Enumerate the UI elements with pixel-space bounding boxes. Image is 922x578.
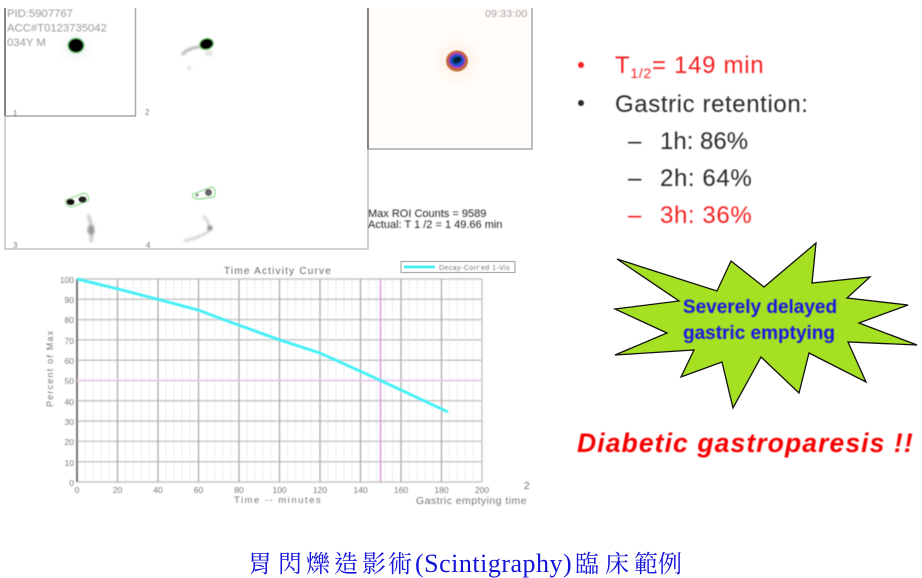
- y axis labels: 80: [65, 315, 74, 325]
- y axis title: Percent of Max: [45, 330, 55, 407]
- x axis labels: 20: [113, 485, 122, 495]
- y axis labels: 90: [65, 295, 74, 305]
- chart grid: [77, 279, 482, 482]
- x axis labels: 140: [353, 485, 368, 495]
- y axis labels: 30: [65, 417, 74, 427]
- x axis labels: 180: [434, 485, 449, 495]
- timestamp: 09:33:00: [485, 8, 527, 20]
- findings list: [578, 52, 809, 229]
- x axis labels: 40: [153, 485, 163, 495]
- half time: T: [615, 52, 630, 79]
- gastric emptying time label: Gastric emptying time: [416, 495, 527, 507]
- x axis labels: 0: [75, 485, 80, 495]
- callout text: gastric emptying: [683, 323, 835, 344]
- decay curve: [77, 279, 448, 412]
- x axis labels: 80: [234, 485, 244, 495]
- panel: gastric scan frames: [5, 8, 368, 250]
- frame numbers: [13, 108, 151, 250]
- half time: [578, 52, 764, 81]
- y axis labels: 50: [65, 376, 74, 386]
- chart: time activity curve: [45, 262, 530, 507]
- ROI result text: Max ROI Counts = 9589: [368, 208, 486, 220]
- callout: starburst: [615, 243, 917, 408]
- x axis labels: 120: [313, 485, 327, 495]
- y axis labels: 0: [69, 478, 74, 488]
- patient information: 034Y M: [7, 37, 46, 49]
- patient information: ACC#T0123735042: [7, 22, 107, 34]
- frame numbers: 2: [145, 108, 150, 117]
- scan frame 2: [182, 37, 215, 70]
- scan frame 1: [64, 35, 88, 57]
- y axis labels: [60, 275, 74, 488]
- callout text: Severely delayed: [683, 297, 837, 318]
- x axis labels: 100: [272, 485, 287, 495]
- y axis labels: 70: [65, 336, 74, 346]
- patient information: PID:5907767: [7, 8, 73, 20]
- chart title: Time Activity Curve: [224, 266, 332, 277]
- ROI result text: Actual: T 1 /2 = 1 49.66 min: [368, 219, 502, 231]
- gastric retention heading: Gastric retention:: [615, 91, 809, 118]
- retention 2h: –: [628, 165, 642, 192]
- colour hot spot: [438, 42, 476, 80]
- x axis labels: 160: [394, 485, 408, 495]
- half time: 1/2: [630, 65, 652, 81]
- retention 3h: –: [628, 202, 642, 229]
- retention 1h: –: [628, 128, 642, 155]
- x axis title: Time -- minutes: [234, 495, 322, 506]
- legend: Decay-Corr'ed 1-Vis: [439, 265, 510, 272]
- frame numbers: 3: [13, 241, 18, 250]
- panel number: 2: [524, 481, 530, 492]
- y axis labels: 100: [60, 275, 74, 285]
- half time: = 149 min: [652, 52, 764, 79]
- x axis labels: [75, 485, 489, 495]
- diagnosis: Diabetic gastroparesis !!: [577, 428, 914, 458]
- retention 1h: 1h: 86%: [660, 128, 748, 155]
- x axis labels: 200: [475, 485, 489, 495]
- scan frame 4: [184, 187, 215, 241]
- frame numbers: 1: [13, 109, 18, 118]
- legend: [401, 262, 515, 272]
- panel: colour scan frame: [368, 8, 532, 149]
- retention 2h: 2h: 64%: [660, 165, 752, 192]
- frame numbers: 4: [146, 241, 151, 250]
- x axis labels: 60: [194, 485, 203, 495]
- y axis labels: 20: [65, 437, 74, 447]
- retention 3h: 3h: 36%: [660, 202, 752, 229]
- y axis labels: 40: [65, 397, 74, 407]
- caption: (Scintigraphy): [415, 549, 572, 578]
- y axis labels: 60: [65, 356, 74, 366]
- caption: 胃閃爍造影術: [248, 551, 412, 578]
- y axis labels: 10: [65, 458, 74, 468]
- caption: 臨床範例: [575, 551, 682, 578]
- scan frame 3: [66, 193, 94, 242]
